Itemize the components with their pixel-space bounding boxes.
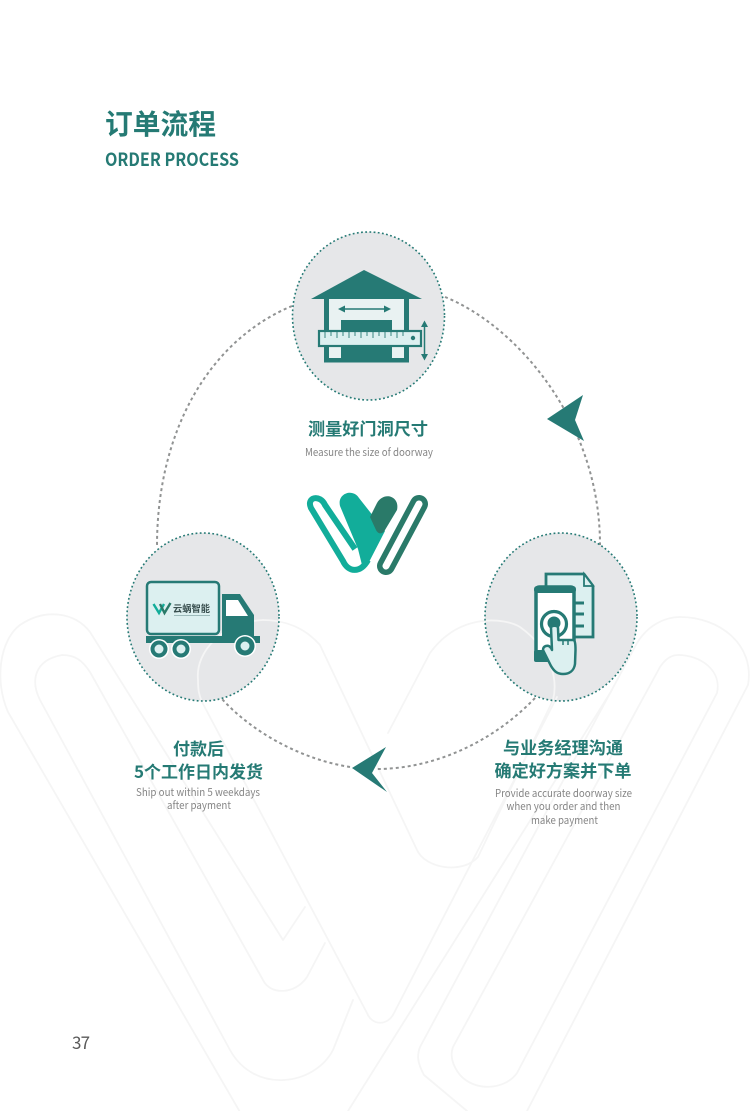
arrow: right to left (352, 747, 387, 792)
circle backgrounds (127, 232, 637, 701)
dotted outline (485, 533, 637, 701)
dotted outline (127, 533, 279, 701)
logo: middle fill (340, 493, 385, 568)
description line 1: Ship out within 5 weekdays (136, 785, 260, 800)
title english: ORDER PROCESS (105, 146, 239, 172)
logo: left clip (310, 498, 368, 570)
logo: right pill (386, 504, 419, 566)
step text: measure (305, 415, 433, 460)
background watermark logo (0, 614, 749, 1111)
description line 1: Provide accurate doorway size (495, 786, 632, 801)
icon: warehouse door with ruler (311, 270, 428, 362)
icon: delivery truck (146, 582, 260, 659)
heading line 1: 付款后 (173, 735, 224, 760)
heading line 1: 与业务经理沟通 (503, 734, 623, 759)
dashed cycle ring (157, 297, 600, 769)
title chinese: 订单流程 (105, 103, 216, 143)
title (105, 103, 239, 172)
description: Measure the size of doorway (305, 445, 433, 460)
step circle: confirm order (485, 533, 637, 701)
arrow: top to right (547, 395, 584, 441)
step text: confirm order (494, 734, 632, 828)
page number: 37 (72, 1029, 90, 1054)
heading: 测量好门洞尺寸 (308, 415, 428, 440)
icon: phone, document and hand (534, 574, 593, 674)
heading line 2: 5个工作日内发货 (134, 758, 263, 783)
description line 2: after payment (167, 798, 231, 813)
icon: delivery truck: 云蜗智能 (173, 601, 210, 615)
description line 3: make payment (531, 813, 598, 828)
description line 2: when you order and then (506, 799, 620, 814)
center logo (310, 493, 419, 570)
heading line 2: 确定好方案并下单 (494, 757, 632, 782)
dotted outline (292, 232, 444, 400)
step circle: shipping (127, 533, 279, 701)
step circle: measure (292, 232, 444, 400)
logo: dark leaf (370, 496, 397, 533)
step text: shipping (134, 735, 263, 813)
